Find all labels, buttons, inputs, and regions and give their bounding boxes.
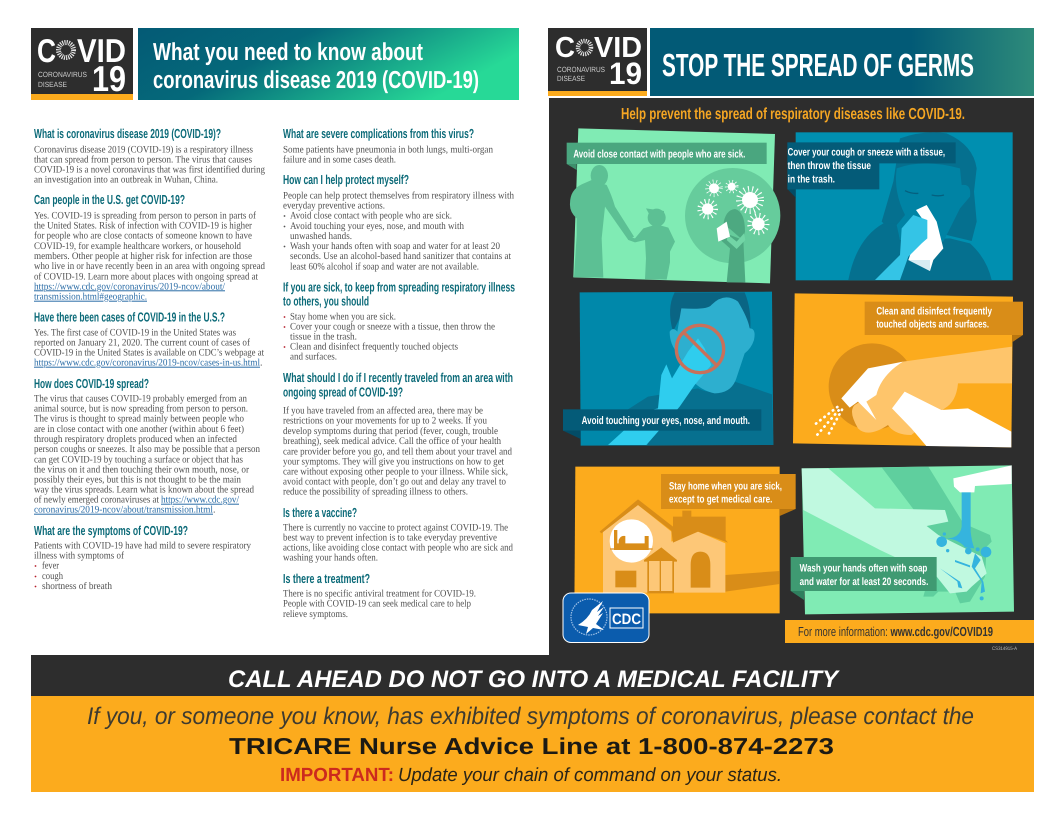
text block: recently traveled: If you have traveled from an affected area, there may be (283, 406, 483, 417)
tricare advice panel (31, 696, 1034, 792)
text block: cases in the US (34, 327, 264, 369)
text block: vaccine: best way to prevent infection is to take everyday preventive (283, 532, 497, 543)
text block: vaccine: washing your hands often. (283, 553, 378, 564)
heading: can people get it: Can people in the U.S. get COVID-19? (34, 192, 185, 207)
call ahead bar (31, 655, 1034, 696)
text block: treatment: There is no specific antiviral treatment for COVID-19. (283, 588, 476, 599)
text block: recently traveled: restrictions on your movements for up to 2 weeks. If you (283, 416, 487, 427)
text block: can people get it (34, 211, 265, 303)
text block: cases in the US: . (260, 358, 262, 369)
text block: protect myself: Avoid close contact with people who are sick. (290, 211, 452, 222)
panel: cover your cough (787, 132, 1013, 280)
text block: how does it spread: The virus that causes COVID-19 probably emerged from an (34, 393, 247, 404)
banner: Clean and disinfect frequently (876, 305, 992, 317)
heading: vaccine: Is there a vaccine? (283, 505, 357, 520)
heading: treatment: Is there a treatment? (283, 571, 370, 586)
CDC logo (563, 593, 649, 642)
CDC logo: CDC (612, 611, 641, 628)
spray droplets (813, 407, 842, 438)
banner: in the trash. (788, 173, 835, 185)
pale hand (802, 468, 987, 593)
text block: recently traveled: breathing), seek medical advice. Call the office of your health (283, 436, 501, 447)
heading: recently traveled: What should I do if I recently traveled from an area with (283, 370, 513, 385)
heading: how does it spread: How does COVID-19 spread? (34, 376, 149, 391)
house (600, 499, 728, 593)
text block: how does it spread: way the virus spreads. Learn what is known about the spread (34, 484, 254, 495)
left title banner: coronavirus disease 2019 (COVID-19) (153, 67, 479, 94)
heading: if you are sick: If you are sick, to keep from spreading respiratory illness (283, 280, 515, 295)
text block: can people get it: the United States. Risk of infection with COVID-19 is higher (34, 221, 253, 232)
text block: vaccine: actions, like avoiding close contact with people who are sick and (283, 543, 513, 554)
woman with tissue (882, 132, 977, 241)
text block: protect myself: Wash your hands often with soap and water for at least 20 (290, 241, 500, 252)
banner: touched objects and surfaces. (876, 318, 989, 330)
text block: can people get it: Yes. COVID-19 is spreading from person to person in parts of (34, 211, 257, 222)
right logo: COVID 19: C (555, 32, 575, 64)
right logo: COVID 19: DISEASE (557, 74, 585, 83)
dark germs panel (549, 98, 1034, 656)
banner (567, 143, 767, 170)
left logo: COVID 19: 19 (92, 58, 126, 99)
text block: recently traveled: develop symptoms during that period (fever, cough, trouble (283, 426, 499, 437)
text block: complications (283, 145, 493, 166)
right logo: COVID 19: CORONAVIRUS (557, 65, 605, 74)
text block: protect myself: Avoid touching your eyes, nose, and mouth with (290, 221, 464, 232)
heading: protect myself: How can I help protect myself? (283, 172, 409, 187)
text block: symptoms list: fever (42, 561, 60, 572)
text block: if you are sick: Stay home when you are sick. (290, 311, 396, 322)
virus particles (700, 182, 767, 232)
heading: what is coronavirus: What is coronavirus disease 2019 (COVID-19)? (34, 126, 221, 141)
heading: if you are sick (283, 280, 515, 309)
left logo: COVID 19: VID (77, 32, 126, 69)
back hand shadow (882, 467, 992, 603)
banner (791, 557, 937, 600)
banner: except to get medical care. (669, 493, 772, 505)
banner: Avoid touching your eyes, nose, and mouth. (582, 414, 750, 426)
text block: recently traveled: care provider before you go, and tell them about your travel and (283, 446, 512, 457)
text block: protect myself: People can help protect themselves from respiratory illness with (283, 190, 514, 201)
publication code: CS314915-A (992, 646, 1018, 652)
text block: complications: Some patients have pneumonia in both lungs, multi-organ (283, 145, 493, 156)
prohibited sign (676, 325, 724, 373)
left title banner (138, 28, 519, 100)
faucet (953, 465, 1012, 492)
heading: cases in the US: Have there been cases of COVID-19 in the U.S.? (34, 310, 225, 325)
heading: symptoms: What are the symptoms of COVID-19? (34, 523, 188, 538)
sick woman (717, 209, 745, 282)
text block: can people get it: transmission.html#geographic. (34, 292, 147, 303)
text block: can people get it: COVID-19, for example healthcare workers, or household (34, 241, 241, 252)
text block: if you are sick (284, 311, 495, 363)
text block: protect myself: everyday preventive actions. (283, 200, 385, 211)
text block: what is coronavirus: Coronavirus disease 2019 (COVID-19) is a respiratory illness (34, 144, 253, 155)
text block: how does it spread: through respiratory droplets produced when an infected (34, 434, 237, 445)
important note: Update your chain of command on your status. (398, 765, 782, 786)
heading: recently traveled: ongoing spread of COVID-19? (283, 385, 403, 400)
text block: treatment: relieve symptoms. (283, 609, 348, 620)
text block: what is coronavirus (34, 144, 265, 186)
left logo: COVID 19: DISEASE (38, 80, 67, 89)
right article column (283, 126, 515, 620)
text block: symptoms list: cough (42, 571, 63, 582)
text block: cases in the US: reported on January 21, 2020. The current count of cases of (34, 337, 251, 348)
banner: and water for at least 20 seconds. (800, 575, 928, 587)
text block: can people get it: who live in or have recently been in an area with ongoing spread (34, 261, 265, 272)
text block: symptoms list: illness with symptoms of (34, 551, 125, 562)
text block: can people get it: for people who are close contacts of someone known to have (34, 231, 252, 242)
text block: recently traveled: your symptoms. They will give you instructions on how to get (283, 456, 504, 467)
banner: then throw the tissue (788, 159, 871, 171)
banner: Cover your cough or sneeze with a tissue, (788, 146, 945, 158)
text block: how does it spread: of newly emerged coronaviruses at (34, 495, 159, 506)
banner: Wash your hands often with soap (800, 562, 927, 574)
nurse advice line: TRICARE Nurse Advice Line at 1-800-874-2273 (229, 733, 834, 759)
important note: IMPORTANT: (280, 765, 394, 786)
text block: what is coronavirus: COVID-19 is a novel coronavirus that was first identified during (34, 165, 265, 176)
text block: how does it spread: possibly their eyes, but this is not thought to be the main (34, 474, 241, 485)
heading: if you are sick: to others, you should (283, 294, 369, 309)
left logo: COVID 19 (31, 28, 133, 100)
spray bottle (841, 362, 903, 420)
text block: can people get it: members. Other people at higher risk for infection are those (34, 251, 252, 262)
banner: Avoid close contact with people who are sick. (573, 147, 745, 160)
text block: vaccine (283, 522, 513, 564)
arm and hand (852, 347, 1012, 435)
text block: protect myself (283, 190, 514, 272)
text block: can people get it: https://www.cdc.gov/coronavirus/2019-ncov/about/ (34, 281, 225, 292)
right logo: COVID 19: 19 (609, 56, 642, 91)
text block: how does it spread: animal source, but is now spreading from person to person. (34, 404, 248, 415)
text block: cases in the US: COVID-19 in the United States is available on CDC’s webpage at (34, 347, 264, 358)
call ahead bar: CALL AHEAD DO NOT GO INTO A MEDICAL FACILITY (228, 666, 840, 693)
text block: protect myself: unwashed hands. (290, 231, 352, 242)
right title banner (650, 28, 1034, 96)
text block: if you are sick: and surfaces. (290, 352, 337, 363)
text block: how does it spread: are in close contact with one another (within about 6 feet) (34, 424, 244, 435)
panel: clean and disinfect (793, 293, 1023, 447)
text block: symptoms list (34, 541, 251, 592)
text block: if you are sick: Clean and disinfect frequently touched objects (290, 342, 458, 353)
banner (865, 302, 1023, 342)
panel: stay home (574, 467, 796, 613)
text block: how does it spread: https://www.cdc.gov/ (161, 495, 239, 506)
text block: how does it spread: . (213, 505, 216, 516)
text block: how does it spread: the virus on it and then touching their own mouth, nose, or (34, 464, 250, 475)
face (670, 297, 755, 393)
text block: how does it spread: The virus is thought to spread mainly between people who (34, 414, 244, 425)
for more information bar: For more information: www.cdc.gov/COVID19 (798, 624, 993, 639)
water and bubbles (936, 492, 991, 600)
banner (787, 142, 956, 198)
banner (661, 474, 796, 516)
contact message: If you, or someone you know, has exhibited symptoms of coronavirus, please contact the (87, 703, 974, 730)
text block: if you are sick: Cover your cough or sneeze with a tissue, then throw the (290, 321, 495, 332)
text block: recently traveled: avoid contact with people, don’t go out and delay any travel to (283, 477, 506, 488)
left logo: COVID 19: C (37, 32, 56, 69)
banner (563, 409, 761, 439)
text block: protect myself: seconds. Use an alcohol-based hand sanitizer that contains at (290, 251, 511, 262)
panel: wash your hands (791, 465, 1014, 614)
text block: how does it spread: coronavirus/2019-ncov/about/transmission.html (34, 505, 213, 516)
right logo: COVID 19 (548, 28, 647, 96)
text block: how does it spread: can get COVID-19 by touching a surface or object that has (34, 454, 243, 465)
banner: Stay home when you are sick, (669, 480, 782, 492)
text block: cases in the US: https://www.cdc.gov/coronavirus/2019-ncov/cases-in-us.html (34, 358, 260, 369)
text block: if you are sick: tissue in the trash. (290, 332, 357, 343)
text block: recently traveled (283, 406, 512, 498)
for more information bar (785, 620, 1034, 643)
panel: avoid close contact (567, 128, 780, 283)
text block: recently traveled: care without exposing other people to your illness. While sick, (283, 466, 508, 477)
text block: how does it spread (34, 393, 260, 516)
text block: treatment: People with COVID-19 can seek medical care to help (283, 599, 471, 610)
text block: protect myself: least 60% alcohol if soap and water are not available. (290, 261, 479, 272)
left article column (34, 126, 265, 592)
text block: symptoms list: Patients with COVID-19 have had mild to severe respiratory (34, 541, 251, 552)
text block: how does it spread: person coughs or sneezes. It also may be possible that a person (34, 444, 260, 455)
text block: recently traveled: reduce the possibility of spreading illness to others. (283, 487, 468, 498)
text block: can people get it: of COVID-19. Learn more about places with ongoing spread at (34, 272, 258, 283)
right logo: COVID 19: VID (594, 32, 642, 64)
text block: vaccine: There is currently no vaccine to protect against COVID-19. The (283, 522, 508, 533)
heading: complications: What are severe complications from this virus? (283, 126, 474, 141)
left logo: COVID 19: CORONAVIRUS (38, 70, 87, 79)
text block: what is coronavirus: an investigation into an outbreak in Wuhan, China. (34, 175, 218, 186)
adult and child silhouettes (570, 165, 675, 280)
text block: what is coronavirus: that can spread from person to person. The virus that causes (34, 154, 252, 165)
panel: avoid touching face (563, 292, 773, 446)
heading: recently traveled (283, 370, 513, 400)
text block: symptoms list: shortness of breath (42, 581, 112, 592)
left title banner: What you need to know about (153, 39, 423, 66)
text block: treatment (283, 588, 476, 620)
hand (608, 338, 711, 445)
text block: complications: failure and in some cases death. (283, 155, 396, 166)
text block: cases in the US: Yes. The first case of COVID-19 in the United States was (34, 327, 236, 338)
